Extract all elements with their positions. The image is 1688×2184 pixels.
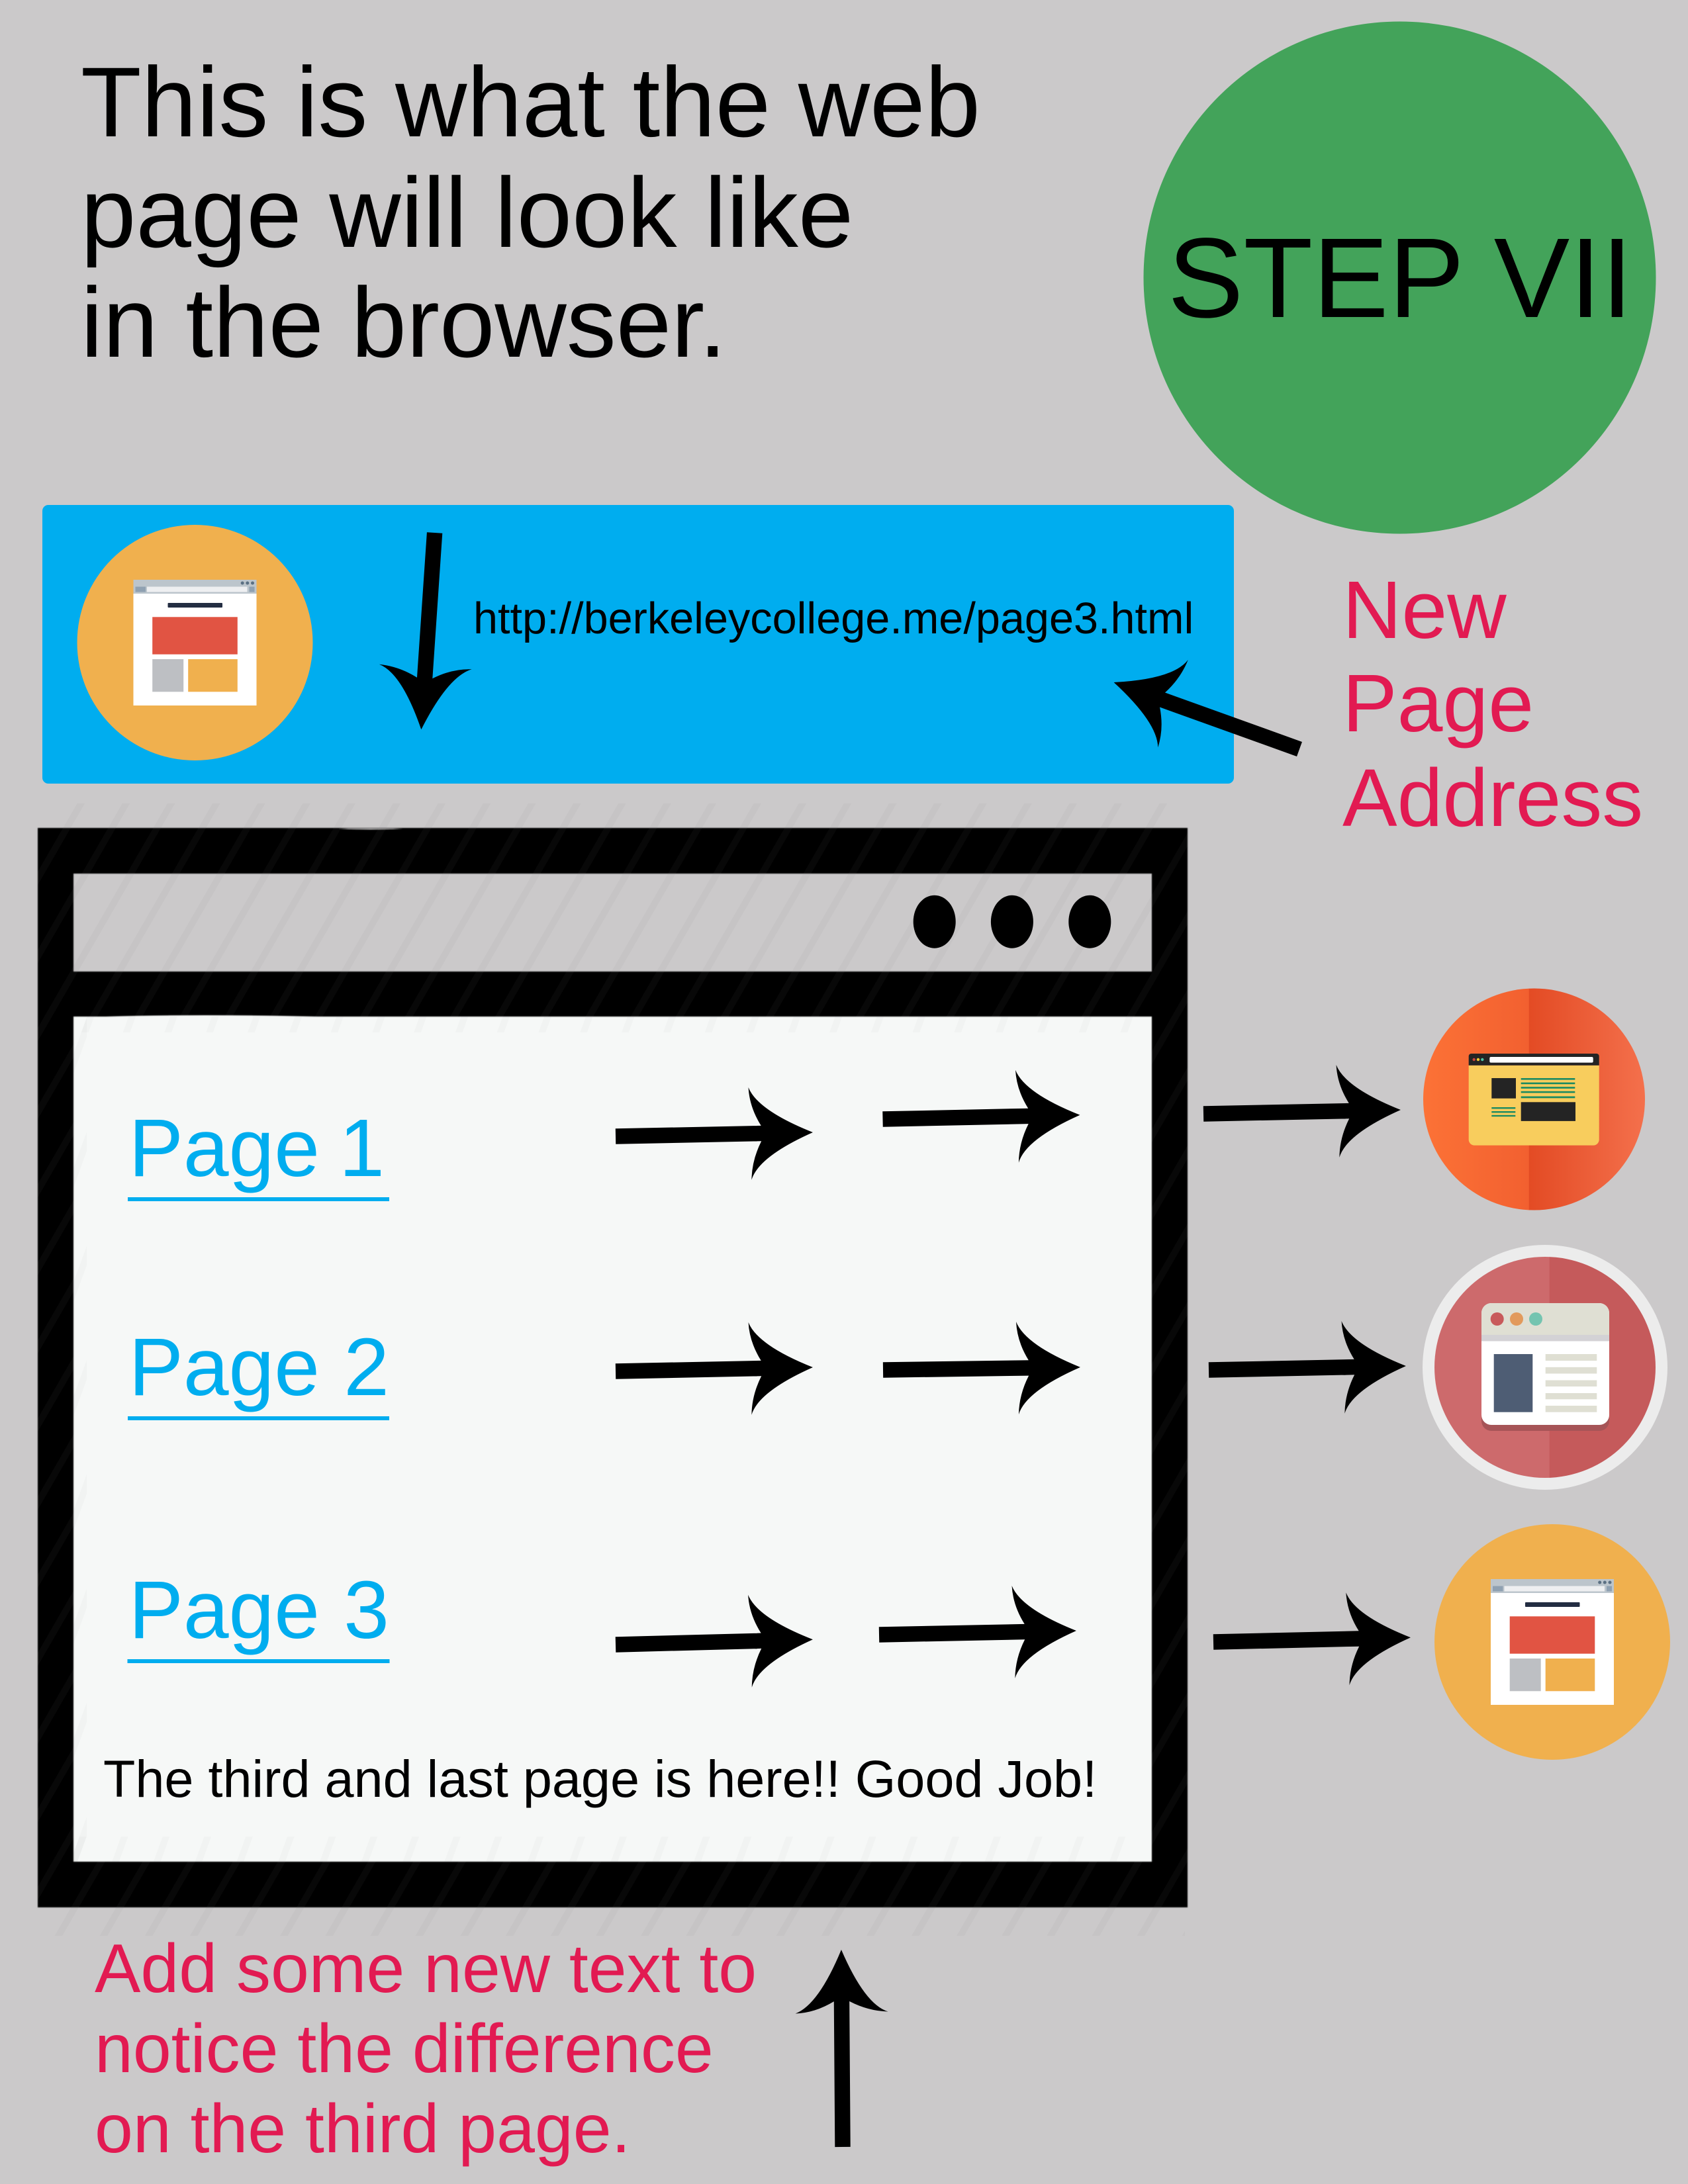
icon: page 1 orange circle <box>1423 988 1646 1210</box>
step badge <box>1144 21 1656 533</box>
arrows: row 3 <box>614 1584 1412 1691</box>
icon: page 3 orange circle <box>1434 1524 1670 1760</box>
arrow: up to page text <box>795 1950 889 2147</box>
link: page 2: Page 2 <box>128 1322 389 1413</box>
address bar panel <box>42 505 1234 784</box>
callout: new page address: New <box>1342 565 1507 656</box>
title: in the browser. <box>81 267 727 378</box>
browser window <box>38 803 1188 1936</box>
web address: http://berkeleycollege.me/page3.html <box>473 594 1194 643</box>
callout: new page address <box>1342 565 1643 844</box>
title: page will look like <box>81 157 853 268</box>
arrow: new page address pointer <box>1098 639 1315 793</box>
callout: new page address: Page <box>1342 658 1534 749</box>
title: This is what the web <box>81 46 980 158</box>
callout: add new text <box>95 1931 757 2167</box>
arrows: row 1 <box>615 1064 1401 1183</box>
arrow: down to address <box>375 529 481 733</box>
icon: page 2 red circle <box>1423 1245 1667 1490</box>
callout: add new text: on the third page. <box>95 2091 631 2167</box>
page text: The third and last page is here!! Good Job! <box>103 1749 1097 1808</box>
browser toolbar <box>73 874 1152 972</box>
step badge: STEP VII <box>1168 215 1633 341</box>
arrows: row 2 <box>615 1320 1407 1418</box>
callout: add new text: Add some new text to <box>95 1931 757 2007</box>
callout: add new text: notice the difference <box>95 2011 714 2087</box>
title <box>81 46 980 378</box>
link: page 1: Page 1 <box>128 1103 385 1194</box>
browser page area <box>73 1015 1152 1862</box>
callout: new page address: Address <box>1342 752 1643 844</box>
link: page 3: Page 3 <box>128 1565 389 1656</box>
icon: orange web page <box>77 525 312 760</box>
